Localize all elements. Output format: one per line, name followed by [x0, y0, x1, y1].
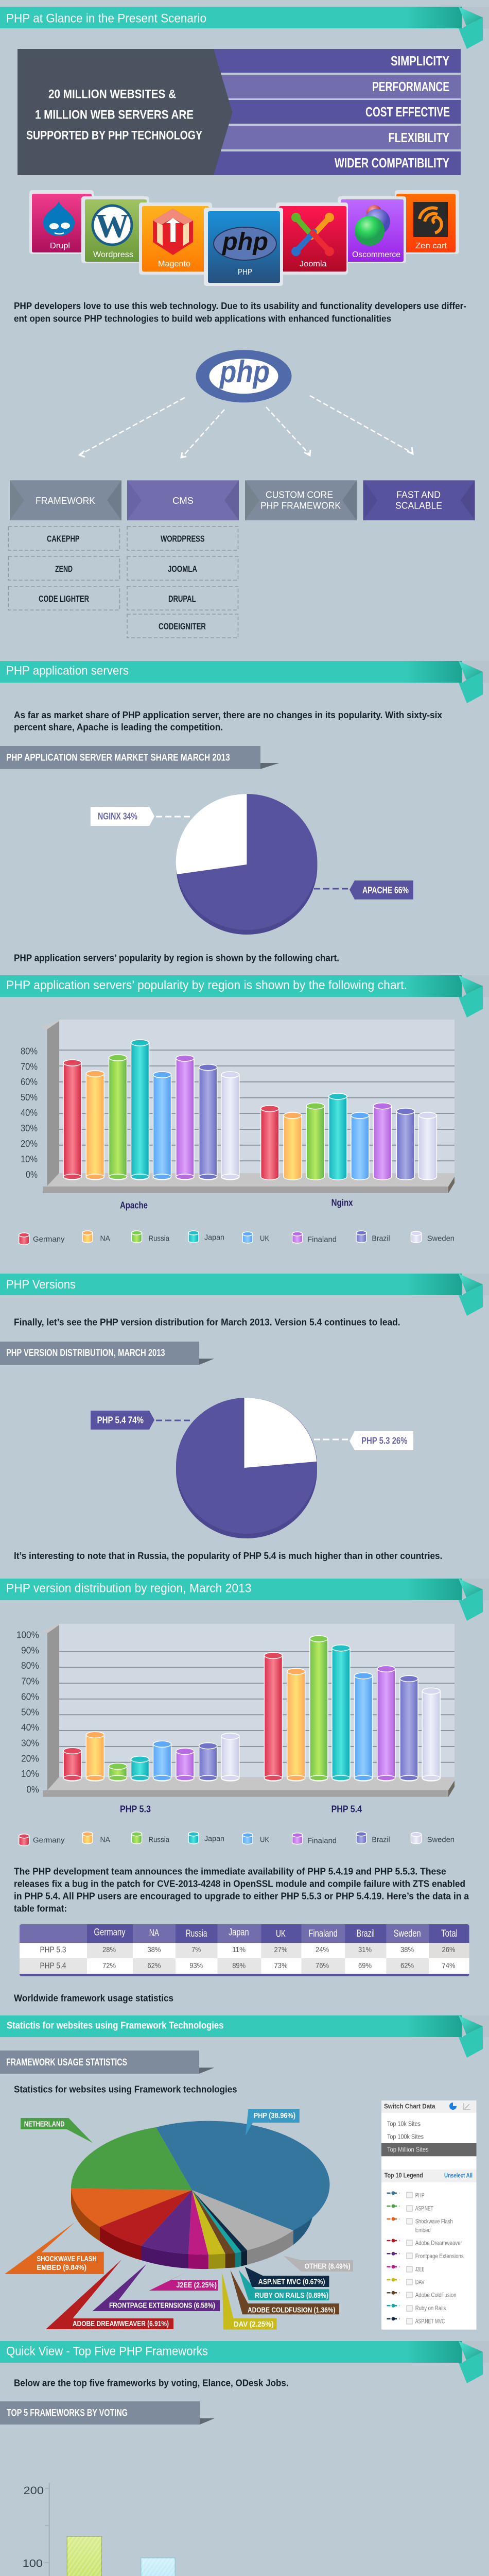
y axis labels: 0% [27, 1784, 39, 1794]
callout: Other [283, 2256, 353, 2272]
table rows: 24% [316, 1945, 329, 1954]
table rows: 31% [358, 1945, 372, 1954]
callout: DAV [222, 2273, 277, 2330]
logo card: Wordpress [81, 196, 149, 263]
legend: countries (servers chart) [19, 1231, 455, 1245]
list labels: CAKEPHP [47, 534, 80, 544]
table rows: 62% [400, 1961, 414, 1970]
y axis labels [21, 1046, 38, 1180]
arrows from PHP logo to categories [79, 396, 413, 457]
ribbon heading: framework statistics [0, 2015, 489, 2058]
callout: Nginx: NGINX 34% [98, 811, 137, 822]
category label: PHP 5.3: PHP 5.3 [120, 1804, 151, 1815]
logo card: Zen cart [395, 190, 459, 254]
legend: countries (versions chart): NA [100, 1835, 110, 1844]
panel: switch chart data and legend [381, 2100, 477, 2330]
logo card: Wordpress: Wordpress [93, 250, 133, 259]
text: development team announcement: in PHP 5.4. All PHP users are encouraged to upgrade to either PHP 5.5.3 or PHP 5.4.19. Here’s the data in a [14, 1891, 469, 1902]
chart: PHP 5.3 vs 5.4 by region [16, 1624, 455, 1815]
y axis labels: 50% [21, 1707, 39, 1717]
table rows: 38% [147, 1945, 161, 1954]
sub heading: version distribution [0, 1342, 214, 1365]
chart: 3D framework pie [5, 2109, 353, 2330]
text: intro paragraph: ent open source PHP technologies to build web applications with enhanced functionalities [14, 314, 391, 324]
logo card: Wordpress: W [95, 207, 129, 245]
text: worldwide framework usage: Worldwide framework usage statistics [14, 1993, 173, 2003]
legend: countries (versions chart): Russia [148, 1835, 170, 1844]
table header: Brazil [357, 1928, 375, 1939]
callout: ASP.NET MVC [245, 2267, 329, 2287]
axis labels [23, 2485, 44, 2576]
callout: Frontpage: FRONTPAGE EXTERNSIONS (6.58%) [109, 2301, 215, 2310]
callout: Adobe Dreamweaver: ADOBE DREAMWEAVER (6.91%) [73, 2319, 169, 2328]
callout: Shockwave Flash: EMBED (9.84%) [37, 2263, 86, 2272]
bar: CodeIgniter [141, 2558, 175, 2576]
callout: Nginx [91, 807, 190, 826]
text: intro paragraph: PHP developers love to use this web technology. Due to its usability and functionality developers use differ- [14, 301, 466, 311]
ribbon heading: framework statistics: Statictis for websites using Framework Technologies [7, 2020, 223, 2031]
table rows: PHP 5.4 [40, 1962, 66, 1971]
panel: PHP benefits: PERFORMANCE [372, 79, 449, 94]
callout: PHP 5.4 [91, 1411, 190, 1430]
category label: Apache: Apache [120, 1200, 148, 1211]
table rows: 93% [189, 1961, 203, 1970]
text: market share [14, 710, 442, 733]
sub heading: framework usage [0, 2050, 214, 2074]
y axis labels: 10% [21, 1769, 39, 1779]
text: top five intro: Below are the top five frameworks by voting, Elance, ODesk Jobs. [14, 2378, 289, 2388]
panel: switch chart data and legend: Unselect All [444, 2172, 473, 2179]
table rows: 7% [191, 1945, 201, 1954]
pie sides [71, 2188, 313, 2269]
ribbon heading: PHP application servers: PHP application servers [6, 664, 129, 678]
legend labels: ASP.NET MVC [415, 2317, 445, 2325]
legend labels: Shockwave Flash [415, 2218, 453, 2225]
logo card: Zen cart: Zen cart [415, 242, 447, 250]
legend labels: DAV [415, 2279, 425, 2286]
icon: PHP logo ellipse: php [219, 354, 270, 389]
category box: Fast and scalable [363, 480, 475, 520]
pie chart: PHP versions [91, 1398, 413, 1538]
y axis labels: 0% [26, 1170, 38, 1180]
category box: Custom core [245, 480, 357, 520]
ribbon heading: version by region [0, 1579, 489, 1621]
table header: Japan [229, 1927, 249, 1938]
legend labels: Frontpage Extensions [415, 2252, 464, 2260]
sub heading: framework usage: FRAMEWORK USAGE STATISTICS [6, 2057, 127, 2068]
text: market share: As far as market share of PHP application server, there are no changes in its popularity. With sixty-six [14, 710, 442, 720]
y axis labels: 70% [21, 1062, 38, 1072]
legend: countries (servers chart): Finaland [307, 1235, 337, 1244]
y axis labels: 20% [21, 1753, 39, 1764]
list labels: CODE LIGHTER [39, 594, 89, 604]
panel: PHP benefits: SUPPORTED BY PHP TECHNOLOGY [26, 129, 202, 143]
y axis labels: 30% [21, 1738, 39, 1748]
logo card: Joomla: Joomla [300, 260, 327, 268]
table rows: 26% [442, 1945, 455, 1954]
sub heading: version distribution: PHP VERSION DISTRIBUTION, MARCH 2013 [6, 1347, 165, 1359]
callout: PHP 5.3: PHP 5.3 26% [361, 1436, 408, 1446]
logo card: PHP: php [221, 228, 268, 256]
legend labels [415, 2192, 464, 2325]
logo card: PHP [204, 208, 283, 286]
callout: Shockwave Flash: SHOCKWAVE FLASH [37, 2255, 97, 2263]
legend checkboxes [407, 2192, 412, 2324]
table: version share by country [20, 1924, 469, 1976]
panel: switch chart data and legend: Switch Chart Data [384, 2103, 435, 2110]
panel: PHP benefits [18, 49, 461, 175]
y axis labels: 60% [21, 1077, 38, 1087]
legend: countries (servers chart): Germany [33, 1235, 65, 1244]
y axis labels: 40% [21, 1722, 39, 1733]
legend labels: Adobe Dreamweaver [415, 2240, 462, 2247]
callout: J2EE: J2EE (2.25%) [176, 2281, 217, 2290]
dashed list: frameworks and CMS names [8, 527, 238, 638]
logo card: Drupal [29, 190, 94, 254]
list labels: DRUPAL [168, 594, 196, 604]
table rows: 69% [358, 1961, 372, 1970]
ribbon heading: PHP at Glance: PHP at Glance in the Present Scenario [6, 11, 206, 26]
ribbon heading: popularity by region [0, 975, 489, 1018]
ribbon heading: PHP Versions [0, 1274, 489, 1316]
legend: countries (versions chart): Japan [204, 1834, 224, 1843]
table rows: PHP 5.3 [40, 1945, 66, 1954]
table rows: 89% [232, 1961, 246, 1970]
table header [94, 1927, 458, 1939]
table header: Finaland [308, 1928, 338, 1939]
table rows: 74% [442, 1961, 455, 1970]
chart: frameworks by voting [23, 2483, 457, 2576]
legend labels: Embed [415, 2227, 431, 2234]
callout: Frontpage [92, 2264, 220, 2311]
legend labels: J2EE [415, 2265, 424, 2273]
legend labels: Ruby on Rails [415, 2304, 446, 2312]
table rows [40, 1945, 455, 1971]
text: development team announcement: table format: [14, 1904, 67, 1914]
ribbon heading: Quick View [0, 2341, 489, 2383]
category label: Nginx: Nginx [331, 1197, 353, 1208]
panel: PHP benefits: WIDER COMPATIBILITY [335, 155, 449, 171]
category box: Framework [10, 480, 121, 520]
y axis labels: 80% [21, 1660, 39, 1671]
category box: Framework: FRAMEWORK [36, 495, 96, 506]
legend: countries (servers chart): Japan [204, 1233, 224, 1242]
sub heading: server market share [0, 746, 279, 769]
callout: Shockwave Flash [5, 2222, 104, 2274]
category box: CMS [127, 480, 239, 520]
panel: switch chart data and legend: Top Million Sites [387, 2146, 429, 2154]
table rows: 27% [274, 1945, 287, 1954]
y axis labels [16, 1630, 39, 1794]
panel: PHP benefits: 1 MILLION WEB SERVERS ARE [35, 108, 194, 122]
table rows: 28% [102, 1945, 116, 1954]
callout: ASP.NET MVC: ASP.NET MVC (0.67%) [258, 2277, 325, 2286]
ribbon heading: PHP Versions: PHP Versions [6, 1278, 76, 1292]
table rows: 76% [316, 1961, 329, 1970]
callout: J2EE [149, 2271, 218, 2291]
callout: Other: OTHER (8.49%) [305, 2262, 351, 2270]
bars: Nginx [261, 1093, 436, 1180]
callout: DAV: DAV (2.25%) [234, 2320, 274, 2329]
icon: PHP logo ellipse [196, 350, 291, 402]
legend: countries (servers chart): UK [260, 1234, 269, 1243]
table header: Sweden [394, 1928, 421, 1939]
bars: PHP 5.3 [63, 1732, 239, 1781]
logo card: Oscommerce [338, 196, 406, 263]
logo card: PHP: PHP [238, 268, 252, 277]
list labels: JOOMLA [168, 564, 197, 574]
logo card: Magento: Magento [158, 260, 190, 268]
icon: line toggle [464, 2103, 470, 2110]
legend: countries (versions chart): Finaland [307, 1836, 337, 1845]
bars: Apache [63, 1040, 239, 1180]
legend labels: Adobe ColdFusion [415, 2292, 457, 2299]
callout: Adobe ColdFusion [230, 2270, 339, 2314]
list labels: WORDPRESS [161, 534, 205, 544]
table header: Russia [186, 1928, 207, 1939]
sub heading: voting: TOP 5 FRAMEWORKS BY VOTING [7, 2407, 128, 2418]
callout: Apache: APACHE 66% [362, 885, 409, 895]
bar: Yii [67, 2536, 102, 2576]
logo card: Magento [139, 202, 212, 275]
table rows: 72% [102, 1961, 116, 1970]
category label: PHP 5.4: PHP 5.4 [331, 1804, 362, 1815]
chart: Apache vs Nginx by region [21, 1020, 455, 1211]
table rows: 73% [274, 1961, 287, 1970]
callout: PHP share [246, 2109, 300, 2136]
logo card: Oscommerce: Oscommerce [352, 250, 400, 259]
panel: PHP benefits: SIMPLICITY [391, 53, 449, 69]
axis labels: 100 [23, 2557, 43, 2569]
category box: Fast and scalable: SCALABLE [395, 500, 442, 511]
y axis labels: 100% [16, 1630, 39, 1640]
text: market share: percent share, Apache is leading the competition. [14, 722, 223, 733]
text: version intro: Finally, let’s see the PHP version distribution for March 2013. Version 5.4 continues to lead. [14, 1317, 400, 1328]
panel: switch chart data and legend: Top 10 Legend [385, 2172, 423, 2179]
y axis labels: 60% [21, 1691, 39, 1702]
axis labels: 200 [24, 2485, 44, 2497]
legend: countries (servers chart): Brazil [372, 1234, 390, 1243]
category box: Custom core: PHP FRAMEWORK [260, 500, 341, 511]
list labels [39, 534, 206, 632]
legend: countries (versions chart): UK [260, 1835, 269, 1844]
panel: switch chart data and legend: Top 100k Sites [387, 2133, 424, 2141]
callout: Netherland [21, 2118, 93, 2143]
text: development team announcement: releases fix a bug in the patch for CVE-2013-4248 in OpenSSL module and compile failure with ZTS enabled [14, 1879, 465, 1889]
category box: Custom core: CUSTOM CORE [266, 489, 333, 500]
text: statistics intro: Statistics for websites using Framework technologies [14, 2084, 237, 2095]
text: intro paragraph [14, 301, 466, 324]
pie chart: server share [91, 794, 413, 935]
text: development team announcement: The PHP development team announces the immediate availability of PHP 5.4.19 and PHP 5.5.3. These [14, 1866, 446, 1876]
ribbon heading: version by region: PHP version distribution by region, March 2013 [6, 1582, 251, 1596]
legend labels: ASP.NET [415, 2205, 433, 2212]
callout: PHP 5.4: PHP 5.4 74% [97, 1415, 144, 1426]
y axis labels: 70% [21, 1676, 39, 1686]
table rows: 62% [147, 1961, 161, 1970]
panel: PHP benefits: FLEXIBILITY [388, 130, 449, 145]
callout: PHP share: PHP (38.96%) [254, 2111, 295, 2120]
panel: PHP benefits: 20 MILLION WEBSITES & [48, 88, 176, 101]
table rows: 11% [232, 1945, 246, 1954]
y axis labels: 50% [21, 1092, 38, 1103]
legend: countries (servers chart): Sweden [427, 1234, 455, 1243]
legend: countries (versions chart): Germany [33, 1836, 65, 1845]
logo card: Drupal: Drupl [50, 242, 70, 250]
pie top [71, 2121, 330, 2255]
ribbon heading: popularity by region: PHP application servers’ popularity by region is shown by the following chart. [6, 978, 407, 992]
callout: Ruby on Rails [239, 2270, 329, 2300]
sub heading: server market share: PHP APPLICATION SERVER MARKET SHARE MARCH 2013 [6, 752, 230, 764]
table header: NA [149, 1928, 159, 1939]
callout: Apache [314, 880, 413, 900]
text: Russia note: It’s interesting to note that in Russia, the popularity of PHP 5.4 is much higher than in other countries. [14, 1551, 442, 1561]
ribbon heading: PHP application servers [0, 661, 489, 703]
list labels: ZEND [55, 564, 73, 574]
category box: Fast and scalable: FAST AND [396, 489, 441, 500]
legend: countries (versions chart) [19, 1832, 455, 1846]
legend: countries (versions chart): Sweden [427, 1835, 455, 1844]
y axis labels: 40% [21, 1108, 38, 1118]
y axis labels: 90% [21, 1645, 39, 1655]
legend labels: PHP [415, 2192, 425, 2199]
table header: UK [276, 1928, 286, 1939]
list labels: CODEIGNITER [159, 621, 206, 632]
text: popularity by region: PHP application servers’ popularity by region is shown by the following chart. [14, 953, 339, 963]
legend: countries (versions chart): Brazil [372, 1835, 390, 1844]
table rows: 38% [400, 1945, 414, 1954]
legend: countries (servers chart): NA [100, 1234, 110, 1243]
panel: PHP benefits: COST EFFECTIVE [365, 104, 450, 120]
ribbon heading: Quick View: Quick View - Top Five PHP Frameworks [6, 2345, 208, 2359]
callout: Netherland: NETHERLAND [24, 2120, 65, 2129]
bars: PHP 5.4 [264, 1636, 440, 1781]
y axis labels: 80% [21, 1046, 38, 1057]
callout: Adobe ColdFusion: ADOBE COLDFUSION (1.36%) [248, 2306, 336, 2314]
table header: Total [441, 1928, 458, 1939]
callout: Ruby on Rails: RUBY ON RAILS (0.89%) [255, 2291, 328, 2300]
logo card: Joomla [276, 202, 348, 275]
callout: PHP 5.3 [314, 1431, 413, 1450]
ribbon heading: PHP at Glance [0, 7, 489, 49]
legend: countries (servers chart): Russia [148, 1234, 170, 1243]
table header: Germany [94, 1927, 126, 1938]
y axis labels: 10% [21, 1154, 38, 1164]
category box: CMS: CMS [172, 495, 194, 506]
icon: pie toggle [449, 2103, 457, 2110]
y axis labels: 30% [21, 1123, 38, 1133]
sub heading: voting [0, 2401, 215, 2425]
text: development team announcement [14, 1866, 469, 1914]
legend markers [387, 2191, 400, 2320]
panel: switch chart data and legend: Top 10k Sites [387, 2120, 421, 2128]
y axis labels: 20% [21, 1139, 38, 1149]
callout: Adobe Dreamweaver [46, 2260, 173, 2329]
